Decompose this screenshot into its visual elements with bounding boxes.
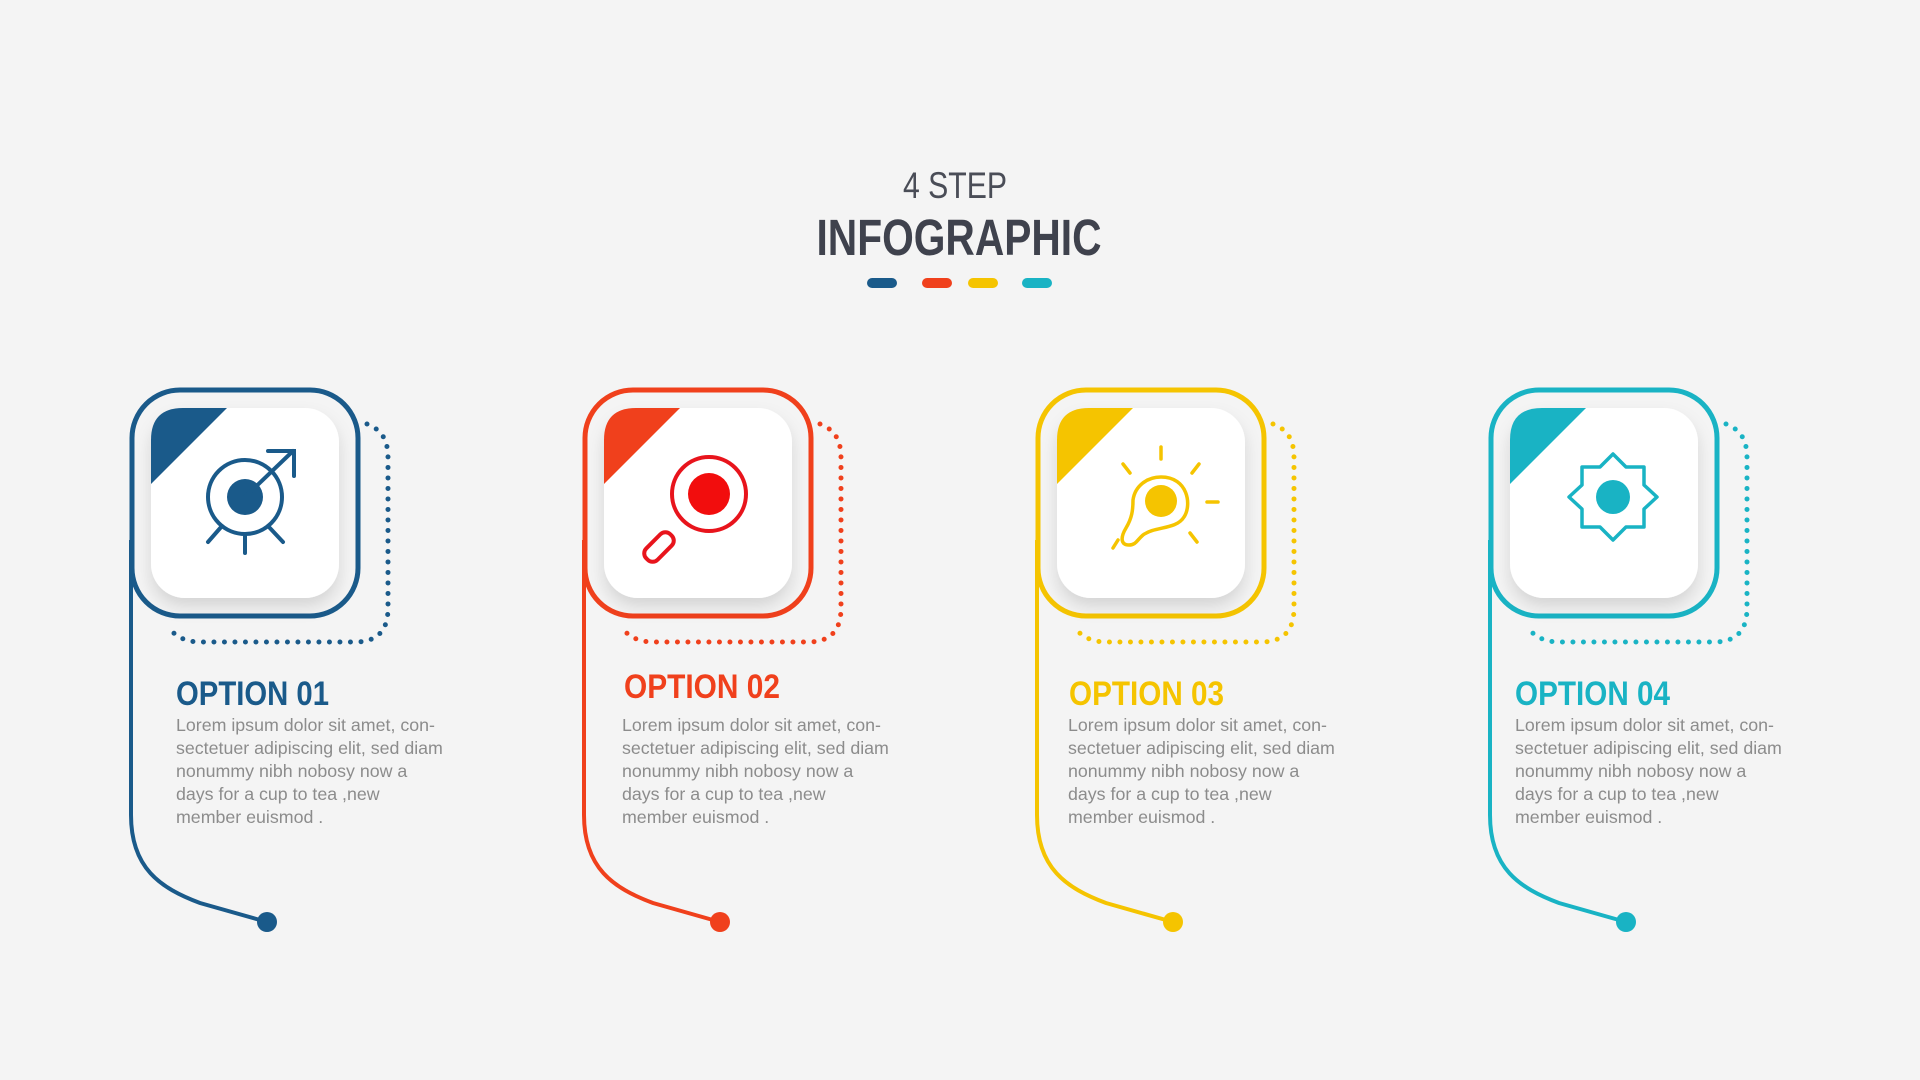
corner tab 2: [604, 408, 680, 484]
body text 2: Lorem ipsum dolor sit amet, con-: [622, 715, 881, 735]
body text 4: member euismod .: [1515, 807, 1662, 827]
outer frame 4: [1491, 390, 1717, 616]
body text 1: Lorem ipsum dolor sit amet, con-: [176, 715, 435, 735]
card 1: option 01: [131, 390, 443, 932]
body text 4: sectetuer adipiscing elit, sed diam: [1515, 738, 1782, 758]
icon: magnifier: [641, 457, 746, 565]
icon: target with arrow: [208, 451, 294, 553]
connector line 2: [584, 540, 720, 922]
end dot 4: [1616, 912, 1636, 932]
corner tab 3: [1057, 408, 1133, 484]
body text 1: nonummy nibh nobosy now a: [176, 761, 407, 781]
body text 1: member euismod .: [176, 807, 323, 827]
corner tab 1: [151, 408, 227, 484]
connector line 3: [1037, 540, 1173, 922]
card 4: option 04: [1490, 390, 1782, 932]
body text 3: days for a cup to tea ,new: [1068, 784, 1272, 804]
card 2: option 02: [584, 390, 889, 932]
connector line 1: [131, 540, 267, 922]
body text 3: Lorem ipsum dolor sit amet, con-: [1068, 715, 1327, 735]
icon tile 2: [604, 408, 792, 598]
corner tab 4: [1510, 408, 1586, 484]
icon tile 4: [1510, 408, 1698, 598]
body text 1: days for a cup to tea ,new: [176, 784, 380, 804]
body text 4: nonummy nibh nobosy now a: [1515, 761, 1746, 781]
title 2: OPTION 02: [624, 668, 780, 706]
dotted path 1: [168, 424, 388, 642]
title 1: OPTION 01: [176, 675, 329, 713]
end dot 2: [710, 912, 730, 932]
title dashes: [867, 278, 1052, 288]
dotted path 4: [1527, 424, 1747, 642]
dotted path 3: [1074, 424, 1294, 642]
body text 3: member euismod .: [1068, 807, 1215, 827]
body text 2: nonummy nibh nobosy now a: [622, 761, 853, 781]
end dot 3: [1163, 912, 1183, 932]
body text 3: sectetuer adipiscing elit, sed diam: [1068, 738, 1335, 758]
connector line 4: [1490, 540, 1626, 922]
body text 2: sectetuer adipiscing elit, sed diam: [622, 738, 889, 758]
outer frame 2: [585, 390, 811, 616]
end dot 1: [257, 912, 277, 932]
title: INFOGRAPHIC: INFOGRAPHIC: [816, 209, 1102, 266]
icon: light bulb: [1113, 447, 1218, 548]
icon tile 1: [151, 408, 339, 598]
title 3: OPTION 03: [1069, 675, 1224, 713]
outer frame 1: [132, 390, 358, 616]
card 3: option 03: [1037, 390, 1335, 932]
icon: gear: [1569, 454, 1657, 540]
body text 3: nonummy nibh nobosy now a: [1068, 761, 1299, 781]
body text 4: Lorem ipsum dolor sit amet, con-: [1515, 715, 1774, 735]
body text 4: days for a cup to tea ,new: [1515, 784, 1719, 804]
icon tile 3: [1057, 408, 1245, 598]
body text 2: days for a cup to tea ,new: [622, 784, 826, 804]
body text 2: member euismod .: [622, 807, 769, 827]
outer frame 3: [1038, 390, 1264, 616]
dotted path 2: [621, 424, 841, 642]
title: 4 STEP: 4 STEP: [903, 165, 1007, 206]
body text 1: sectetuer adipiscing elit, sed diam: [176, 738, 443, 758]
title 4: OPTION 04: [1515, 675, 1670, 713]
